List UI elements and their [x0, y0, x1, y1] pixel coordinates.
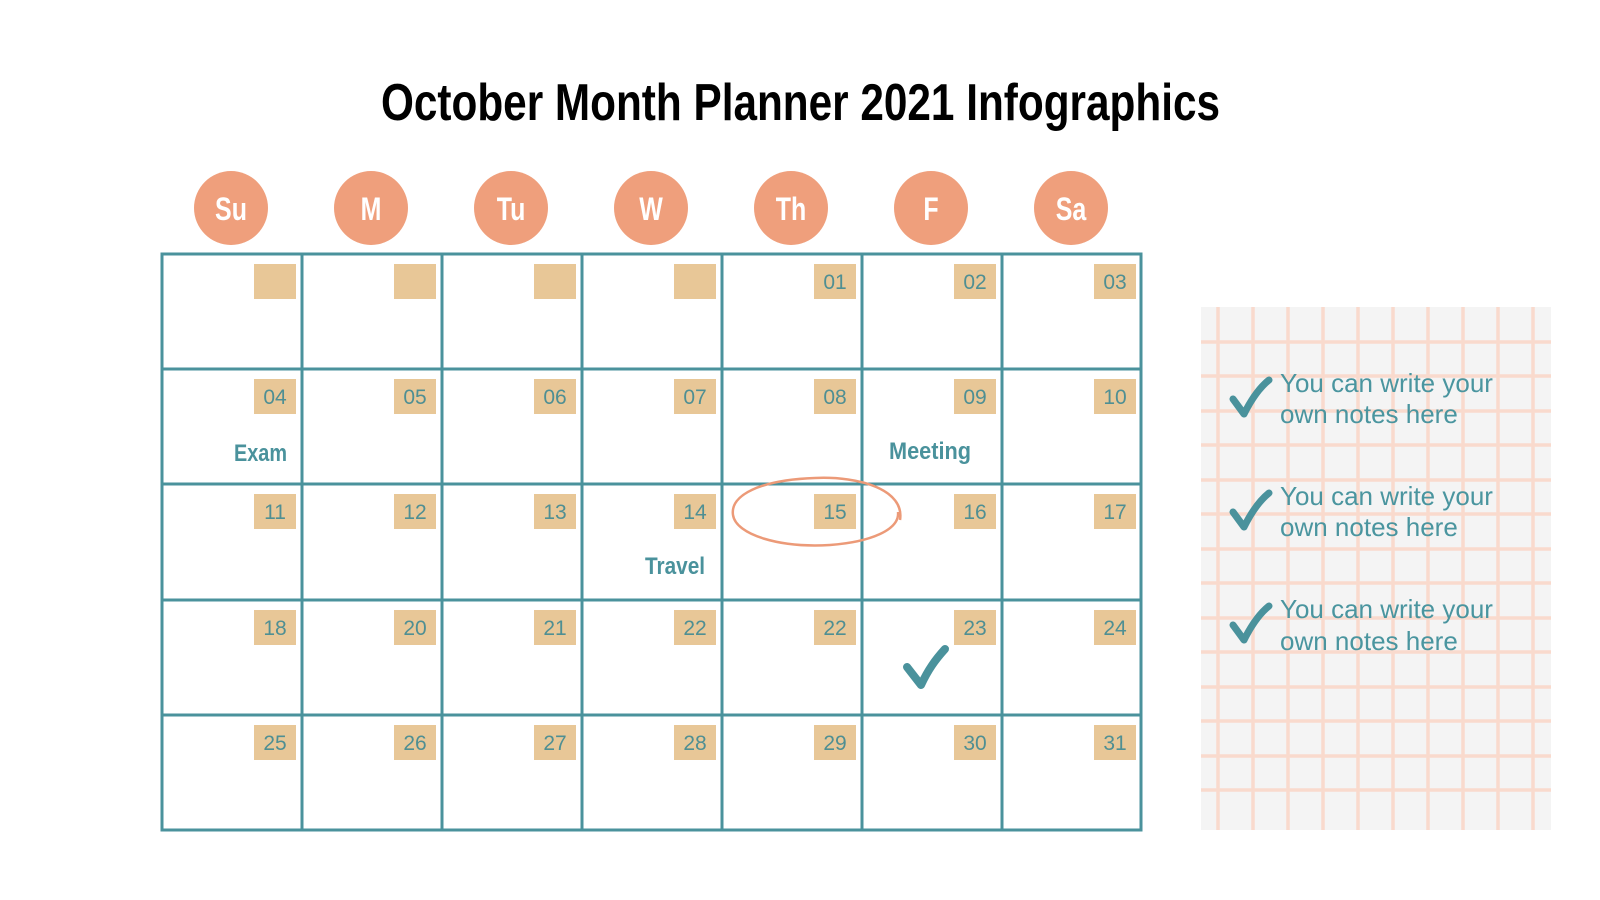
- date numbers: 25: [263, 732, 287, 755]
- date numbers: 27: [543, 732, 567, 755]
- note 3: You can write your: [1280, 594, 1493, 624]
- date numbers: 13: [543, 501, 567, 524]
- date numbers: 08: [823, 386, 847, 409]
- note 1: You can write your: [1280, 368, 1493, 398]
- date numbers: 14: [683, 501, 707, 524]
- title: October Month Planner 2021 Infographics: [381, 74, 1220, 132]
- circle highlight on 15: [733, 478, 900, 545]
- date numbers: 01: [823, 271, 847, 294]
- date numbers: 26: [403, 732, 427, 755]
- date numbers: 21: [543, 617, 567, 640]
- date numbers: 30: [963, 732, 987, 755]
- date numbers: 06: [543, 386, 567, 409]
- date numbers: 11: [264, 501, 286, 524]
- date numbers: 12: [403, 501, 427, 524]
- note 1: own notes here: [1280, 399, 1458, 429]
- weekday headers: Th: [776, 192, 806, 228]
- date numbers: 18: [263, 617, 287, 640]
- date numbers: 31: [1103, 732, 1127, 755]
- note 2: own notes here: [1280, 512, 1458, 542]
- weekday headers: Su: [215, 192, 247, 228]
- date numbers: 10: [1103, 386, 1127, 409]
- note 2: [1233, 481, 1493, 542]
- date numbers: 04: [263, 386, 287, 409]
- date numbers: 02: [963, 271, 987, 294]
- date numbers: [263, 271, 1127, 755]
- date numbers: 29: [823, 732, 847, 755]
- date numbers: 22: [683, 617, 707, 640]
- date numbers: 28: [683, 732, 707, 755]
- date numbers: 20: [403, 617, 427, 640]
- label: Travel: Travel: [645, 553, 705, 580]
- date boxes: [254, 264, 1136, 760]
- date numbers: 07: [683, 386, 707, 409]
- notes panel: [1201, 307, 1551, 830]
- calendar grid: [162, 254, 1141, 830]
- note 3: own notes here: [1280, 626, 1458, 656]
- date numbers: 09: [963, 386, 987, 409]
- weekday headers: W: [639, 192, 664, 228]
- weekday headers: [194, 171, 1108, 245]
- weekday headers: Sa: [1056, 192, 1087, 228]
- date numbers: 17: [1103, 501, 1127, 524]
- date numbers: 22: [823, 617, 847, 640]
- weekday headers: F: [923, 192, 939, 228]
- date numbers: 05: [403, 386, 427, 409]
- weekday headers: M: [361, 192, 381, 228]
- date numbers: 24: [1103, 617, 1127, 640]
- label: Exam: Exam: [234, 440, 287, 467]
- date numbers: 15: [823, 501, 847, 524]
- note 3: [1233, 594, 1493, 656]
- date numbers: 03: [1103, 271, 1127, 294]
- check mark on 23: [907, 649, 945, 685]
- note 2: You can write your: [1280, 481, 1493, 511]
- date numbers: 16: [963, 501, 987, 524]
- date numbers: 23: [963, 617, 987, 640]
- weekday headers: Tu: [497, 192, 525, 228]
- note 1: [1233, 368, 1493, 429]
- label: Meeting: Meeting: [889, 438, 971, 465]
